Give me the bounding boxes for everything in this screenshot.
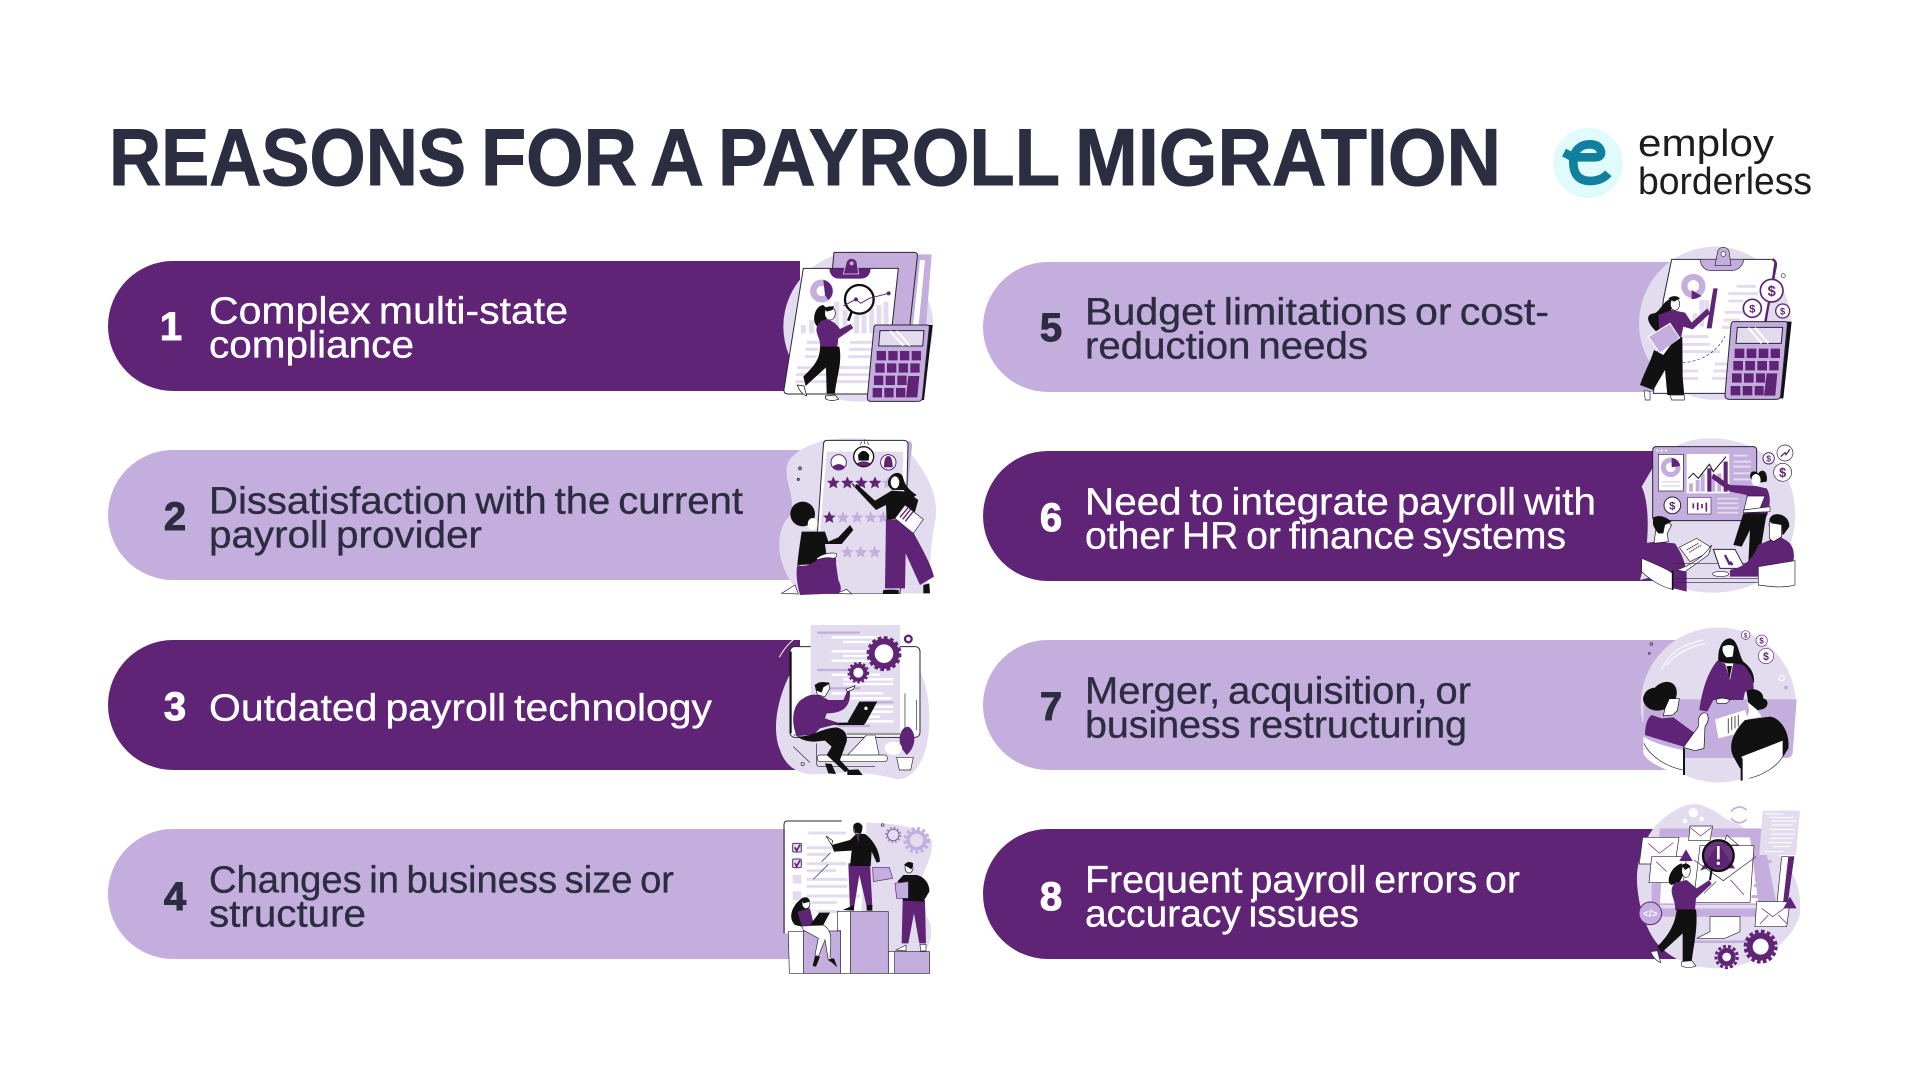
logo wordmark xyxy=(1638,123,1812,203)
panel: reason 2 xyxy=(108,438,936,595)
panel: reason 4 xyxy=(108,821,932,973)
pill 5 xyxy=(983,262,1680,392)
number 6: 6 xyxy=(1040,496,1062,540)
reason text 8: Frequent payroll errors or xyxy=(1085,860,1520,902)
title: A xyxy=(650,113,704,203)
panel: reason 1 xyxy=(108,252,933,402)
icon: handshake at a desk with coins: $ xyxy=(1763,651,1769,663)
icon: man with laptop at monitor and gears xyxy=(776,625,929,779)
reason text 8: accuracy issues xyxy=(1085,894,1359,936)
pill 6 xyxy=(983,451,1680,581)
title: MIGRATION xyxy=(1075,113,1501,203)
number 8: 8 xyxy=(1040,875,1062,919)
logo: employ borderless xyxy=(1553,123,1812,203)
panel: reason 6 xyxy=(983,438,1795,593)
reason text 7 xyxy=(1085,670,1471,746)
number 3: 3 xyxy=(164,685,186,729)
icon: logo circle with e mark xyxy=(1553,128,1623,198)
icon: clipboard, calculator and woman with magnifier xyxy=(783,252,933,402)
icon: woman with clipboard, coins and calculator xyxy=(1639,247,1792,400)
icon: team on growing columns with checklist xyxy=(784,821,932,973)
reason text 2: Dissatisfaction with the current xyxy=(209,480,743,522)
icon: two women rating stars on phone xyxy=(779,438,936,595)
pill 3 xyxy=(108,640,800,770)
pill 4 xyxy=(108,829,800,959)
reason text 5 xyxy=(1085,292,1549,368)
icon: team reviewing dashboard charts: $ xyxy=(1766,454,1771,464)
logo wordmark: borderless xyxy=(1638,161,1812,203)
reason text 2 xyxy=(209,480,743,556)
icon: woman inspecting email alert with gears: </> xyxy=(1643,909,1658,920)
pill 1 xyxy=(108,261,800,391)
reason text 6 xyxy=(1085,482,1596,558)
panel: reason 3 xyxy=(108,625,929,779)
panel: reason 8 xyxy=(983,804,1800,968)
icon: handshake at a desk with coins: $ xyxy=(1759,637,1764,646)
number 4: 4 xyxy=(164,875,187,919)
pill 8 xyxy=(983,829,1680,959)
icon: team reviewing dashboard charts xyxy=(1640,438,1795,593)
reason text 5: reduction needs xyxy=(1085,326,1368,368)
title xyxy=(109,113,1501,203)
number 5: 5 xyxy=(1040,306,1062,350)
reason text 2: payroll provider xyxy=(209,514,482,556)
number 1: 1 xyxy=(160,305,182,349)
icon: handshake at a desk with coins xyxy=(1641,627,1797,783)
title: PAYROLL xyxy=(718,113,1060,203)
reason text 7: business restructuring xyxy=(1085,704,1467,746)
icon: woman with clipboard, coins and calculator: $ xyxy=(1749,303,1756,315)
panel: reason 7 xyxy=(983,627,1797,783)
logo wordmark: employ xyxy=(1638,123,1774,165)
title: FOR xyxy=(481,113,637,203)
pill 2 xyxy=(108,450,800,580)
reason text 3: Outdated payroll technology xyxy=(209,688,712,730)
icon: woman inspecting email alert with gears xyxy=(1637,804,1800,968)
reason text 4: Changes in business size or xyxy=(209,860,674,902)
number 2: 2 xyxy=(164,495,186,539)
reason text 7: Merger, acquisition, or xyxy=(1085,670,1471,712)
icon: handshake at a desk with coins: $ xyxy=(1744,633,1748,639)
title: REASONS xyxy=(109,113,466,203)
reason text 6: other HR or finance systems xyxy=(1085,516,1566,558)
reason text 1: Complex multi-state xyxy=(209,290,568,332)
icon: woman with clipboard, coins and calculator: $ xyxy=(1768,284,1776,300)
reason text 6: Need to integrate payroll with xyxy=(1085,482,1596,524)
pill 7 xyxy=(983,640,1680,770)
reason text 1 xyxy=(209,290,568,366)
icon: team reviewing dashboard charts: $ xyxy=(1669,500,1676,512)
number 7: 7 xyxy=(1040,685,1062,729)
panel: reason 5 xyxy=(983,247,1792,400)
reason text 5: Budget limitations or cost- xyxy=(1085,292,1549,334)
reason text 4: structure xyxy=(209,894,366,936)
icon: team reviewing dashboard charts: $ xyxy=(1779,466,1786,480)
reason text 4 xyxy=(209,860,674,936)
reason text 8 xyxy=(1085,860,1520,936)
icon: woman with clipboard, coins and calculator: $ xyxy=(1780,306,1786,316)
reason text 1: compliance xyxy=(209,324,414,366)
